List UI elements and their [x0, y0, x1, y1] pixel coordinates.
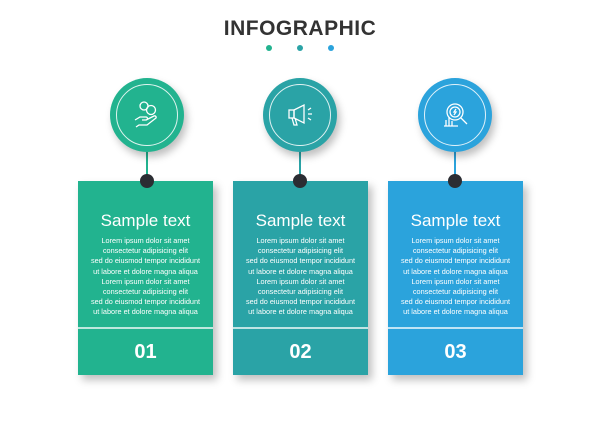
card 1: Sample text — [101, 211, 190, 230]
card 3: Lorem ipsum dolor sit amet — [411, 277, 500, 286]
card 2: consectetur adipisicing elit — [258, 246, 343, 255]
card 2: sed do eiusmod tempor incididunt — [246, 297, 355, 306]
card 3: Lorem ipsum dolor sit amet — [411, 236, 500, 245]
stem 1 — [146, 152, 148, 178]
card 3: ut labore et dolore magna aliqua — [403, 307, 508, 316]
icon circle 1: money hand — [110, 78, 184, 152]
card 1 — [78, 181, 213, 375]
icon circle 2: megaphone — [263, 78, 337, 152]
dot 2 — [293, 174, 307, 188]
card 2: ut labore et dolore magna aliqua — [248, 307, 353, 316]
card 3: Sample text — [411, 211, 500, 230]
card 2: 02 — [289, 341, 312, 363]
card 1: sed do eiusmod tempor incididunt — [91, 256, 200, 265]
card 1: ut labore et dolore magna aliqua — [93, 267, 198, 276]
card 3: consectetur adipisicing elit — [413, 287, 498, 296]
card 1: Lorem ipsum dolor sit amet — [101, 277, 190, 286]
card 2: ut labore et dolore magna aliqua — [248, 267, 353, 276]
card 3: sed do eiusmod tempor incididunt — [401, 297, 510, 306]
card 1: 01 — [134, 341, 157, 363]
card 3: sed do eiusmod tempor incididunt — [401, 256, 510, 265]
card 3: 03 — [444, 341, 467, 363]
card 2: consectetur adipisicing elit — [258, 287, 343, 296]
card 3: ut labore et dolore magna aliqua — [403, 267, 508, 276]
card 2: Sample text — [256, 211, 345, 230]
card 3 — [388, 181, 523, 375]
card 2: Lorem ipsum dolor sit amet — [256, 277, 344, 286]
card 1: ut labore et dolore magna aliqua — [93, 307, 198, 316]
card 2: sed do eiusmod tempor incididunt — [246, 256, 355, 265]
title: INFOGRAPHIC — [224, 17, 376, 40]
icon circle 3: magnifier chart — [418, 78, 492, 152]
card 1: sed do eiusmod tempor incididunt — [91, 297, 200, 306]
card 3: consectetur adipisicing elit — [413, 246, 498, 255]
card 1: consectetur adipisicing elit — [103, 246, 188, 255]
stem 2 — [299, 152, 301, 178]
card 2 — [233, 181, 368, 375]
dot 3 — [448, 174, 462, 188]
title dots — [266, 45, 334, 51]
dot 1 — [140, 174, 154, 188]
card 1: consectetur adipisicing elit — [103, 287, 188, 296]
stem 3 — [454, 152, 456, 178]
card 2: Lorem ipsum dolor sit amet — [256, 236, 344, 245]
card 1: Lorem ipsum dolor sit amet — [101, 236, 190, 245]
